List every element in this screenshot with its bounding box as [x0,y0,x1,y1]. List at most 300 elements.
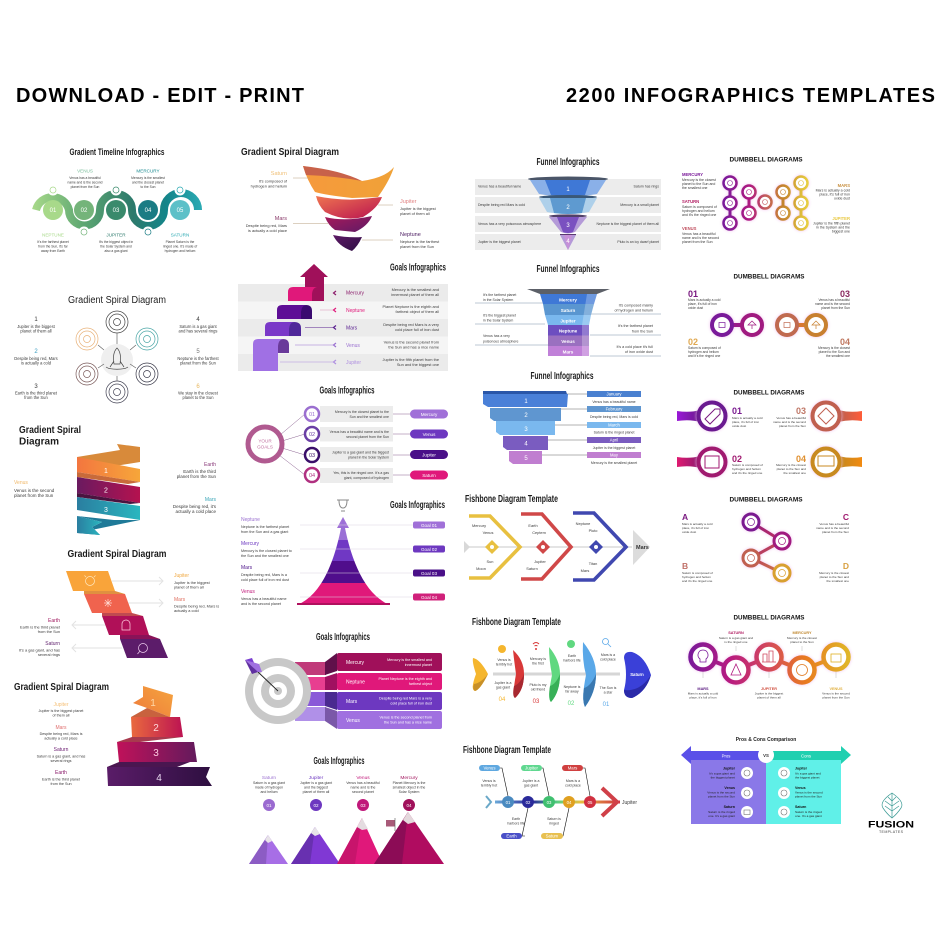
cons text: one. It's a gas giant [795,814,822,818]
rib numbers: 01 [603,702,610,708]
labels: Earth is the third [183,469,216,474]
rib numbers: 03 [533,699,540,705]
node text: terribly hot [481,784,497,788]
left text: It's the farthest planet [483,293,516,297]
labels: Venus [14,480,28,486]
month tags: February [606,406,623,412]
row text: Yes, this is the ringed one. It's a gas [333,471,389,475]
right text [614,304,653,354]
heading: download edit print: DOWNLOAD - EDIT - PRINT [16,85,304,107]
ribs [473,642,596,707]
left labels: oxide dust [688,306,703,310]
panel: dumbbell diagram 1 [682,156,850,244]
rocket hub [101,344,133,376]
right blocks: Venus [346,718,360,724]
labels: Neptune [400,232,421,238]
left labels: Jupiter is the biggest [17,324,56,329]
ziggurat: 3 [153,748,159,759]
node text: Saturn is [547,817,561,821]
panel: funnel infographics 2 [475,264,661,356]
title: Fishbone Diagram Template [472,617,561,628]
pros text: Saturn [724,805,735,809]
chain icons [698,650,841,676]
pros arrow [681,746,766,764]
rib numbers [499,697,610,708]
month tags: Despite being red, Mars is cold [590,415,638,419]
flag [386,818,395,831]
your goals ring: GOALS [257,444,273,450]
right blocks: Neptune [346,680,365,686]
rib text: Venus is [497,658,511,662]
ribbon: 3 [104,507,108,514]
rib text: Mercury is [530,657,546,661]
right labels: JUPITER [832,216,850,221]
left labels: Saturn is composed of [732,463,763,467]
number circles: 01 [266,803,272,808]
panel: stacked parallelogram spiral [19,549,219,658]
column text: Planet Mercury is the [393,781,425,785]
left labels: planet from the Sun [682,240,713,244]
month tags: May [610,452,619,458]
column text: second planet [352,790,374,794]
pyramid [297,517,390,605]
numbered rings [305,407,319,482]
left labels: and it's the ringed one [682,213,716,217]
labels: from the Sun [50,782,72,786]
trophy icon [337,500,349,511]
labels: ringed one. It's made of [163,244,197,248]
right labels: MARS [838,183,850,188]
row text: Neptune is the biggest planet of them all [597,222,659,226]
ribbon: 1 [104,468,108,475]
bottom labels: Venus is the second [822,692,850,696]
row text: Mars [346,326,358,332]
row text: Mercury is a small planet [620,203,659,207]
labels: is actually a cold place [248,228,287,233]
funnel: Saturn [561,308,575,313]
right labels: 5 [196,349,200,355]
rib numbers: 02 [568,701,575,707]
ribbon [77,444,140,535]
row text: giant, composed of hydrogen [344,476,389,480]
node text [481,779,637,826]
labels: several rings [51,759,72,763]
column text: Jupiter is a gas giant [300,781,332,785]
pros text: Venus [724,786,735,790]
labels: Despite being red, it's [173,504,217,509]
cons text: Saturn [795,805,806,809]
bottom labels: JUPITER [761,687,777,691]
labels: VENUS [77,168,93,174]
ziggurat [107,686,212,786]
column text: and helium [260,790,278,794]
month tags: April [610,438,618,442]
right labels: Venus has a beautiful [819,522,849,526]
labels: hydrogen and helium [165,249,196,253]
node text: cold place [565,784,581,788]
arrow labels: Pros [722,754,730,758]
vs badge [758,747,774,763]
numbered circles: 03 [113,208,120,214]
labels: SATURN [171,232,189,238]
labels: Saturn is a gas giant, and has [37,754,86,758]
left labels [682,172,719,244]
funnel: Mercury [559,298,577,302]
bone labels: Mars [581,568,589,573]
top labels [719,631,817,644]
labels: Planet Saturn is the [166,240,195,244]
nodes: 04 [567,800,572,805]
labels: Despite being red, Mars is [40,732,83,736]
title: Funnel Infographics [536,264,600,275]
layered blocks: 5 [524,456,528,462]
pros text: the biggest planet [711,776,735,780]
spine [495,800,620,804]
left labels: place, it's full of iron [682,526,709,530]
bottom labels: planet of them all [757,696,781,700]
labels: Despite being red, Mars [246,223,287,228]
row text: second planet from the Sun [346,435,389,439]
labels: Saturn [45,641,60,647]
row text: planet in the Solar System [348,456,389,460]
left labels: Saturn is composed of [688,346,721,350]
labels: Mars [275,216,287,222]
node text: harbors life [507,822,525,826]
left labels: and it's the ringed one [688,354,721,358]
zigzag dumbbell [743,514,790,581]
top labels: is the ringed one [725,640,748,644]
labels: Saturn [271,171,287,177]
cons text: It's a gas giant and [795,772,821,776]
number circles: 04 [406,803,412,808]
block text: farthest object [409,682,432,686]
layered blocks: 4 [524,442,528,448]
left labels: 02 [732,454,742,464]
numbered circles: 01 [50,208,57,214]
vs badge: VS [763,753,769,758]
column text: Venus [356,775,370,781]
your goals ring: YOUR [258,438,272,444]
ribbon: 2 [104,488,108,494]
right labels: Venus has a beautiful [818,298,850,302]
bottom pills [501,833,563,839]
block text: Planet Neptune is the eighth and [378,677,432,681]
left labels: cold place full of iron red dust [241,578,289,582]
row text: Despite being red Mars is cold [478,203,525,207]
row text: Jupiter is the fifth planet from the [383,357,439,362]
funnel: 1 [566,187,570,193]
bone labels: Sun [487,559,493,564]
logo: fusion templates [868,793,914,834]
right labels [815,289,850,358]
right text: It's a cold place it's full [617,345,653,349]
left labels: hydrogen and helium [682,209,715,213]
node text: Mars is a [566,779,580,783]
funnel [528,176,608,250]
column text: name and is the [351,786,376,790]
title: Gradient Spiral [19,425,81,436]
row text: Sun and the biggest one [397,362,439,367]
right text: from the Sun [632,330,653,334]
panel: pros and cons comparison [681,737,851,824]
icon circles [741,767,790,818]
right labels: planet from the Sun [822,530,849,534]
right labels: biggest one [832,230,850,234]
numbered circles: 02 [81,208,88,214]
left labels: and it's the ringed one [732,471,763,475]
bone labels: Mercury [472,523,486,528]
left labels [732,406,763,475]
block text: innermost planet [405,663,432,667]
nodes: 03 [547,800,552,805]
right labels: planet from the Sun [180,360,217,366]
icon: leaf [882,793,902,818]
column text: Saturn [262,775,276,781]
column text: Venus has a beautiful [346,781,380,785]
title: Funnel Infographics [530,371,594,382]
left labels: Despite being red, Mars [14,356,58,361]
connector lines [542,394,587,455]
labels: also a gas giant [104,249,128,253]
rib text: old friend [531,688,545,692]
row text: Jupiter is a gas giant and the biggest [332,450,389,454]
row text [346,287,440,367]
goal lines [300,525,413,597]
panel: goals staircase [238,262,448,371]
panel: funnel infographics 3 [483,371,641,465]
handles [677,410,862,468]
right labels: the smallest one [826,579,849,583]
mars label: Mars [636,545,649,551]
row text: Venus has a beautiful name [478,184,521,188]
rib text: Mars is a [601,653,615,657]
heading: 2200 infographics templates: 2200 INFOGRAPHICS TEMPLATES [566,85,935,107]
bottom labels: VENUS [829,687,843,691]
labels: NEPTUNE [42,232,64,238]
right labels: place, it's full of iron [819,192,850,196]
rib text: Pluto is my [529,683,547,687]
right labels: C [843,512,849,522]
labels: and the closest planet [132,180,164,184]
labels: Earth [48,618,60,624]
row text: Venus has a very poisonous atmosphere [478,222,541,226]
panel: ziggurat spiral [14,682,212,786]
rib text: harbors life [563,658,581,662]
column text: Saturn is a gas giant [253,781,285,785]
right labels: in the System and the [816,226,850,230]
right labels [816,512,849,583]
pros text: Venus is the second [707,790,735,794]
left text: in the Solar System [483,318,513,322]
blue chevron [573,513,626,580]
left labels: name and is the second [682,236,719,240]
top labels: Saturn is a gas giant and [719,636,753,640]
left labels: place, it's full of iron [688,302,717,306]
labels: Jupiter [53,702,69,708]
labels: Earth [55,770,67,776]
right blocks [337,653,442,729]
pills: Saturn [422,473,436,478]
left labels: 01 [688,289,698,299]
numbered circles: 04 [145,208,152,214]
numbered circles: 05 [177,208,184,214]
left labels: Neptune is the farthest planet [241,525,289,529]
connector lines [279,414,410,475]
spine [468,546,632,548]
right labels: the smallest one [783,471,806,475]
month tags: Venus has a beautiful name [592,400,636,404]
row text: Neptune [346,308,365,314]
end triangle [633,530,650,565]
labels [246,171,440,249]
top labels: SATURN [728,631,744,635]
left labels: is actually a cold [21,360,52,366]
right labels: 03 [796,406,806,416]
block text: Venus is the second planet from [380,716,432,720]
layered blocks: 3 [524,427,528,433]
bone labels: Jupiter [534,559,547,564]
right labels: planet to the Sun and [820,575,849,579]
funnel: 4 [566,239,570,245]
right labels: the smallest one [826,354,850,358]
bottom labels: place, it's full of iron [689,696,717,700]
column text: Mercury [400,775,418,781]
row text: Venus is the second planet from [384,340,439,344]
spiral funnel [303,166,394,251]
gray rows [320,406,393,483]
funnel: Neptune [559,328,578,334]
labels: of them all [52,714,70,718]
pros text [707,766,736,818]
pros text: It's a gas giant and [709,772,735,776]
steps [66,571,168,658]
goal pills [413,522,445,600]
right labels: Mercury is the closest [819,571,849,575]
column text: Solar System [399,790,419,794]
left labels: Mercury is the closest planet to [241,549,292,553]
tick lines [703,646,836,678]
cons text [795,766,823,818]
panel: goals target [245,632,442,729]
title: Goals Infographics [390,500,445,511]
bone labels: Pluto [589,528,597,533]
cons text: Venus is the second [795,790,823,794]
cons text: Jupiter [795,766,808,770]
column text: and the biggest [304,786,328,790]
up arrow [300,264,328,301]
left labels: 01 [732,406,742,416]
left labels: oxide dust [732,424,746,428]
panel: gradient timeline infographics [36,147,198,253]
title: DUMBBELL DIAGRAMS [734,614,805,622]
left labels: the smallest one [682,186,708,190]
labels [19,573,219,657]
rib text: Jupiter is a [495,681,512,685]
title: Funnel Infographics [536,157,600,168]
right labels: 04 [796,454,806,464]
funnel: Venus [561,339,575,344]
right labels: Jupiter is the fifth planet [813,222,850,226]
bottom labels: Mars is actually a cold [688,692,718,696]
left text [483,293,518,344]
labels: Venus is the second [14,488,55,493]
right labels: D [843,561,849,571]
rib text: a star [604,690,613,694]
left labels: Mars is actually a cold [732,416,763,420]
row text [478,184,659,244]
right labels: Neptune is the farthest [177,356,219,361]
block text: Despite being red Mars is a very [379,696,432,700]
labels: Mars [55,725,67,731]
title: Fishbone Diagram Template [465,494,558,505]
goal pills: Goal 04 [421,595,437,600]
bone labels: Ceptem [532,530,546,535]
row text: Venus [346,343,360,349]
month tags: Mercury is the smallest planet [591,461,637,465]
bone labels: Saturn [526,566,538,571]
left labels: MERCURY [682,172,703,177]
labels: Mars [205,497,216,503]
labels: Jupiter [400,199,417,205]
arrows [72,577,163,652]
labels: hydrogen and helium [251,184,287,188]
left labels: hydrogen and helium [688,350,719,354]
left labels: B [682,561,688,571]
panel: gradient spiral diagram with rocket hub [14,295,219,403]
left labels [688,289,721,358]
left labels: from the Sun and a gas giant [241,530,288,534]
bottom labels: MARS [697,687,709,691]
month tags: January [607,392,622,396]
right labels: name and is the second [816,526,849,530]
left labels: Venus has a beautiful name [241,597,287,601]
labels: planet of them all [174,584,204,590]
pills: Jupiter [422,452,436,458]
labels: It's a gas giant, and has [19,648,60,652]
rib text: cold place [600,658,616,662]
pros text: Jupiter [723,766,736,770]
left labels: and is the second planet [241,602,281,606]
right labels: 6 [196,384,200,390]
top labels: MERCURY [792,631,812,635]
panel: dumbbell diagram 4 [682,496,849,583]
column text: Jupiter [309,775,324,781]
rib text: terribly hot [496,662,512,666]
left labels: Neptune [241,517,260,523]
panel: fishbone diagram 3 [463,745,637,839]
layered blocks: 2 [524,413,528,419]
right labels: 03 [840,289,850,299]
right labels [813,183,850,234]
panel: goals mountains [249,756,444,864]
month tags: Jupiter is the biggest planet [593,446,635,450]
labels: name and is the second [67,180,103,184]
node text: Earth [512,817,520,821]
node text: Jupiter [622,800,637,806]
top labels: Mercury is the closest [787,636,817,640]
top icons [498,638,611,653]
funnel: 2 [566,205,570,211]
right blocks: Mercury [346,660,365,666]
block text [378,658,432,724]
row text: Jupiter is the biggest planet [478,240,521,244]
number circles: 03 [360,803,366,808]
title: DUMBBELL DIAGRAMS [734,390,805,396]
connector chevrons [280,291,336,364]
labels: to the Sun [140,185,156,189]
left labels: Saturn is composed of [682,571,713,575]
numbered rings: 03 [309,453,315,459]
